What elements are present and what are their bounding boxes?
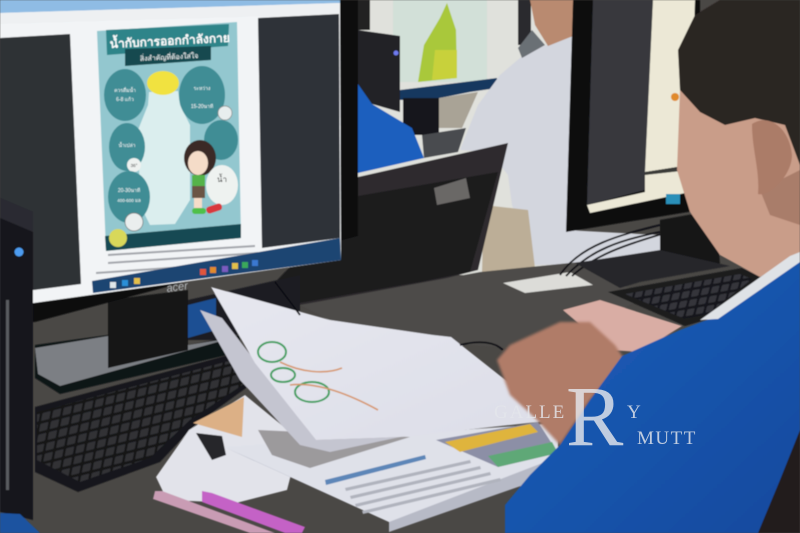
map yellow patch <box>445 424 538 452</box>
base <box>575 250 730 288</box>
bubble: during exercise: ระหว่าง <box>194 86 211 92</box>
poster background <box>97 22 241 250</box>
badge 36 degrees <box>127 158 141 172</box>
open book under paper <box>156 395 558 532</box>
screen separator line <box>645 165 690 175</box>
right monitor <box>566 0 730 288</box>
blue shirt <box>505 258 800 533</box>
book photo strip <box>258 430 410 468</box>
background monitor <box>400 78 497 135</box>
bubble: plain water <box>109 123 145 171</box>
book edge thickness <box>226 448 556 532</box>
bubble: drink 6-8 glasses <box>104 69 146 121</box>
desk surface right <box>300 260 640 350</box>
keyboard right <box>608 268 762 326</box>
bezel <box>566 0 700 232</box>
cartoon girl <box>184 140 216 214</box>
background person in blue shirt <box>358 84 424 173</box>
bubble: water note <box>206 165 238 205</box>
book page orange panel <box>193 397 244 437</box>
bubble: plain water: น้ำเปล่า <box>119 140 136 149</box>
bubble: before exercise: 20-30นาที <box>118 187 140 194</box>
watermark <box>494 368 697 464</box>
background computer tower <box>358 30 400 112</box>
neck and face <box>677 90 800 277</box>
poster title: น้ำกับการออกกำลังกาย <box>109 28 230 51</box>
cables <box>275 225 662 350</box>
blue shirt corner bottom left <box>0 513 40 533</box>
left dark panel <box>0 34 81 292</box>
acer logo: acer <box>166 280 190 295</box>
windows taskbar <box>92 238 341 293</box>
dark chair corner <box>758 430 800 533</box>
poster subtitle banner <box>125 46 211 66</box>
back wall <box>355 0 570 275</box>
hand <box>497 322 625 445</box>
poster on screen <box>97 22 241 251</box>
green tree drawing <box>258 342 329 402</box>
chair back <box>260 143 508 305</box>
book text lines <box>345 460 501 514</box>
magenta pen <box>202 491 305 533</box>
keyboard body <box>35 352 268 492</box>
student <box>497 0 800 533</box>
watermark Y: Y <box>627 402 641 423</box>
background keyboard <box>422 128 466 158</box>
pens <box>153 491 305 533</box>
badge 36 degrees: 36° <box>131 163 138 168</box>
bubble: water note: น้ำ <box>217 173 227 184</box>
map green patch <box>488 442 558 467</box>
background person in white shirt <box>460 0 660 272</box>
blue heading stroke <box>325 455 426 485</box>
bubble: after exercise <box>204 120 238 160</box>
background black hair <box>356 0 370 30</box>
shadow below ear <box>760 170 800 225</box>
tower stripe <box>6 300 9 490</box>
pale pink pen <box>153 491 275 533</box>
footer logo <box>109 229 127 247</box>
bubble: drink 6-8 glasses: 6-8 แก้ว <box>116 96 134 103</box>
mouse pad <box>503 272 593 293</box>
book lower page <box>225 423 558 522</box>
book left page <box>156 395 300 503</box>
pink book <box>563 300 682 352</box>
blue jacket seen behind monitor <box>188 298 216 338</box>
clock icon lower <box>125 213 143 231</box>
computer tower foreground <box>0 198 33 520</box>
chair mesh <box>260 172 498 303</box>
hair <box>678 0 800 165</box>
taskbar buttons <box>666 194 680 204</box>
dark screen <box>587 0 653 205</box>
paper sheet with drawing <box>200 287 556 452</box>
chair mesh reflection <box>434 178 470 205</box>
keyboard keys <box>37 358 262 482</box>
bubble: during exercise: 15-20นาที <box>191 103 213 110</box>
ear <box>752 120 792 194</box>
watermark GALLE: GALLE <box>494 402 566 423</box>
main white sheet <box>211 287 556 440</box>
tower front edge <box>0 198 33 232</box>
web page text lines <box>96 245 258 274</box>
bubble: during exercise <box>179 66 225 124</box>
poster subtitle: สิ่งสำคัญที่ต้องใส่ใจ <box>140 51 199 63</box>
book dark printed blob <box>196 433 226 460</box>
tower power LED <box>14 248 24 256</box>
colourful book map <box>436 422 558 467</box>
taskbar icons <box>110 260 258 288</box>
tower body <box>0 198 33 520</box>
white collar <box>700 252 800 320</box>
dumbbell <box>205 203 223 214</box>
white screen page <box>645 0 695 172</box>
left monitor <box>0 0 358 394</box>
foreground keyboard left <box>35 352 268 492</box>
keyboard right keys <box>625 274 752 319</box>
monitor base <box>35 335 240 394</box>
bubble: drink 6-8 glasses: ควรดื่มน้ำ <box>114 85 136 94</box>
clock icon <box>218 106 232 120</box>
poster footer bar <box>105 224 241 251</box>
monitor screen <box>0 0 341 305</box>
orange icon on screen <box>671 93 679 101</box>
bubble: before exercise: 400-600 มล <box>117 198 141 203</box>
poster title banner <box>106 24 229 55</box>
bubble: before exercise <box>108 171 150 223</box>
lower sheet <box>200 310 400 452</box>
right dark panel <box>258 14 340 248</box>
stand <box>660 210 720 270</box>
keyboard right body <box>608 268 762 326</box>
dark gap behind monitor <box>188 275 300 340</box>
watermark large R: R <box>566 368 624 464</box>
bottom white area <box>587 170 690 213</box>
orange branch drawing <box>280 362 378 410</box>
watermark MUTT: MUTT <box>637 428 697 449</box>
browser tab bar <box>0 0 340 13</box>
bottle <box>138 71 190 225</box>
monitor bezel <box>0 0 358 322</box>
monitor stand <box>108 290 188 368</box>
browser toolbar <box>0 3 340 24</box>
